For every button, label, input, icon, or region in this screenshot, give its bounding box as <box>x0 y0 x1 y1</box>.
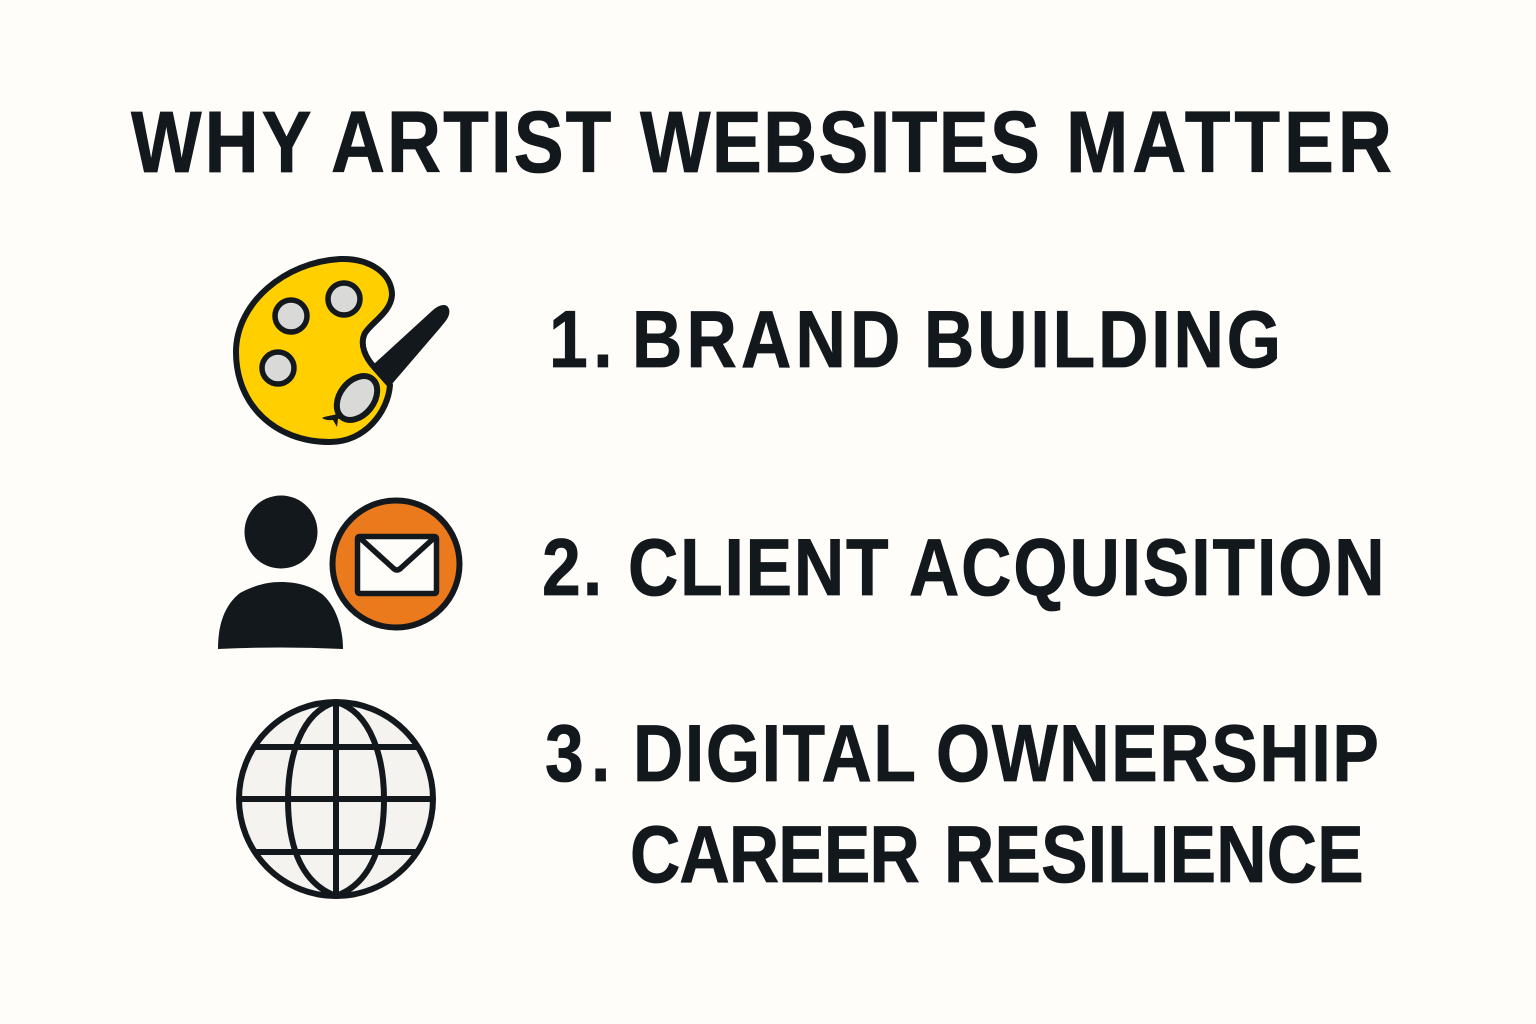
title: MATTER <box>1066 95 1392 191</box>
heading: item 1 <box>549 295 1281 385</box>
heading: item 2 <box>542 523 1385 613</box>
title: ARTIST <box>331 95 611 191</box>
heading: item 3 line 1: 3. <box>545 709 610 799</box>
heading: item 1: BUILDING <box>924 295 1281 385</box>
heading: item 1: 1. <box>549 295 613 385</box>
heading: item 3 line 1 <box>545 709 1379 799</box>
heading: item 2: ACQUISITION <box>909 523 1385 613</box>
heading: item 3 line 2: RESILIENCE <box>944 810 1364 900</box>
heading: item 3 line 2: CAREER <box>630 810 920 900</box>
heading: item 3 line 1: DIGITAL <box>633 709 916 799</box>
heading: item 1: BRAND <box>632 295 900 385</box>
heading: item 2: CLIENT <box>628 523 889 613</box>
heading: item 3 line 1: OWNERSHIP <box>936 709 1379 799</box>
title <box>131 95 1392 191</box>
heading: item 3 line 2 <box>630 810 1364 900</box>
title: WHY <box>131 95 312 191</box>
icon: globe <box>239 702 433 896</box>
icon: artist palette with brush <box>236 259 449 442</box>
heading: item 2: 2. <box>542 523 602 613</box>
title: WEBSITES <box>640 95 1040 191</box>
icon: person with envelope badge <box>218 496 460 649</box>
